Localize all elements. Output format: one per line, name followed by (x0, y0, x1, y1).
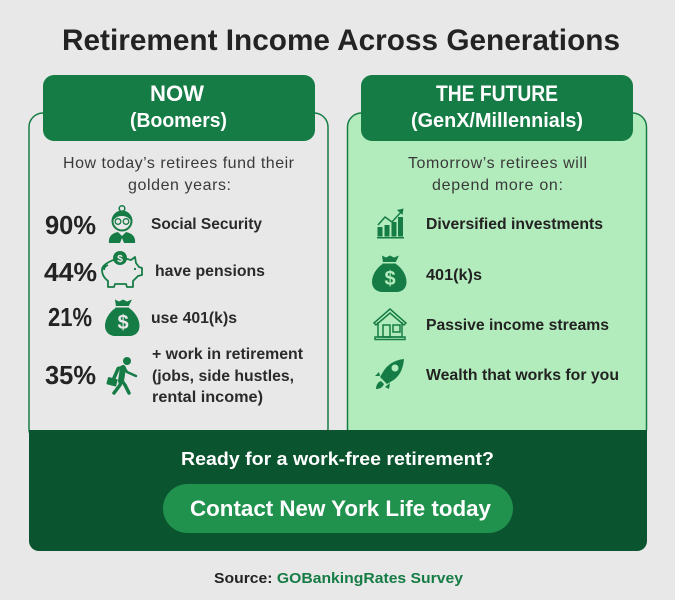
stat: 90% social security: Social Security (151, 216, 262, 233)
text: work in retirement: + work in retirement (152, 346, 303, 363)
header: now (43, 75, 315, 141)
text: work in retirement (152, 346, 303, 406)
cta prompt: Ready for a work-free retirement? (181, 449, 494, 469)
icon: walking person with briefcase (106, 357, 136, 393)
stat: 21% 401(k)s: 21% (48, 302, 92, 332)
intro text: future: Tomorrow’s retirees will (408, 155, 587, 172)
panel: the future (genx/millennials) (348, 75, 646, 443)
icon: rocket (375, 359, 404, 389)
stat: 21% 401(k)s (48, 300, 237, 336)
icon: grandmother (109, 206, 135, 243)
header: the future: (GenX/Millennials) (411, 110, 583, 132)
stat: 35% work in retirement (45, 346, 303, 406)
stat: 44% pensions: 44% (44, 257, 97, 287)
intro text: now (63, 155, 295, 194)
item: wealth that works for you: Wealth that works for you (426, 367, 619, 384)
cta button (163, 484, 513, 533)
icon: house (374, 309, 406, 340)
intro text: future (408, 155, 587, 194)
stat: 21% 401(k)s: use 401(k)s (151, 310, 237, 327)
intro text: future: depend more on: (432, 177, 563, 194)
icon: piggy bank: $ (117, 253, 123, 265)
item: diversified investments (377, 208, 603, 238)
icon: growth chart (377, 208, 404, 238)
header: now: NOW (150, 81, 204, 106)
text: work in retirement: rental income) (152, 389, 263, 406)
icon: money bag (105, 300, 140, 336)
icon: money bag: $ (117, 312, 129, 334)
stat: 35% work in retirement: 35% (45, 360, 96, 390)
title: Retirement Income Across Generations (62, 24, 620, 57)
item: wealth that works for you (375, 359, 619, 389)
item: passive income streams: Passive income streams (426, 317, 609, 334)
intro text: now: golden years: (128, 177, 231, 194)
stat: 90% social security (45, 206, 262, 243)
stat: 90% social security: 90% (45, 210, 96, 240)
stat: 44% pensions (44, 251, 265, 287)
icon: money bag: $ (384, 268, 396, 290)
header: the future (361, 75, 633, 141)
icon: piggy bank (102, 251, 142, 287)
text: work in retirement: (jobs, side hustles, (152, 368, 294, 385)
header: now: (Boomers) (130, 110, 227, 132)
stat: 44% pensions: have pensions (155, 263, 265, 280)
panel: now (boomers) (29, 75, 328, 443)
source line: Source: GOBankingRates Survey (214, 571, 463, 587)
item: 401(k)s: 401(k)s (426, 267, 482, 284)
cta button: Contact New York Life today (190, 496, 491, 521)
item: 401(k)s (372, 256, 482, 292)
call to action band (29, 430, 647, 551)
header: the future: THE FUTURE (436, 81, 558, 106)
intro text: now: How today’s retirees fund their (63, 155, 295, 172)
item: diversified investments: Diversified investments (426, 216, 603, 233)
item: passive income streams (374, 309, 609, 340)
